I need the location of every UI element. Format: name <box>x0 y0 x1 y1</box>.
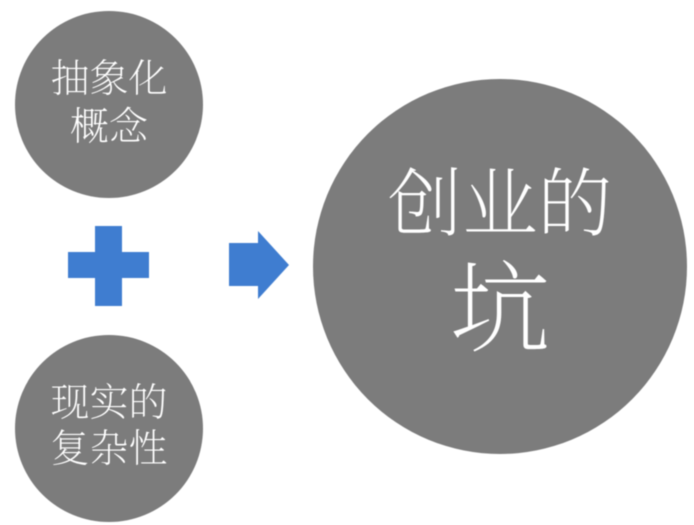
circle: pitfalls of entrepreneurship <box>313 79 687 454</box>
circle: complexity of reality <box>15 335 203 522</box>
label: entrepreneurship: 创业的 <box>387 164 612 247</box>
label: abstract concept <box>50 58 168 149</box>
label: abstract concept: 概念 <box>70 106 148 149</box>
label: pitfall: 坑 <box>450 255 550 366</box>
label: complexity of reality <box>50 382 168 471</box>
circle: abstract concept <box>15 11 203 198</box>
label: complexity of reality: 复杂性 <box>50 428 168 471</box>
icon: plus sign <box>67 225 150 307</box>
label: abstract concept: 抽象化 <box>50 58 168 101</box>
arrow: leads to result <box>228 230 290 300</box>
label: complexity of reality: 现实的 <box>50 382 168 425</box>
